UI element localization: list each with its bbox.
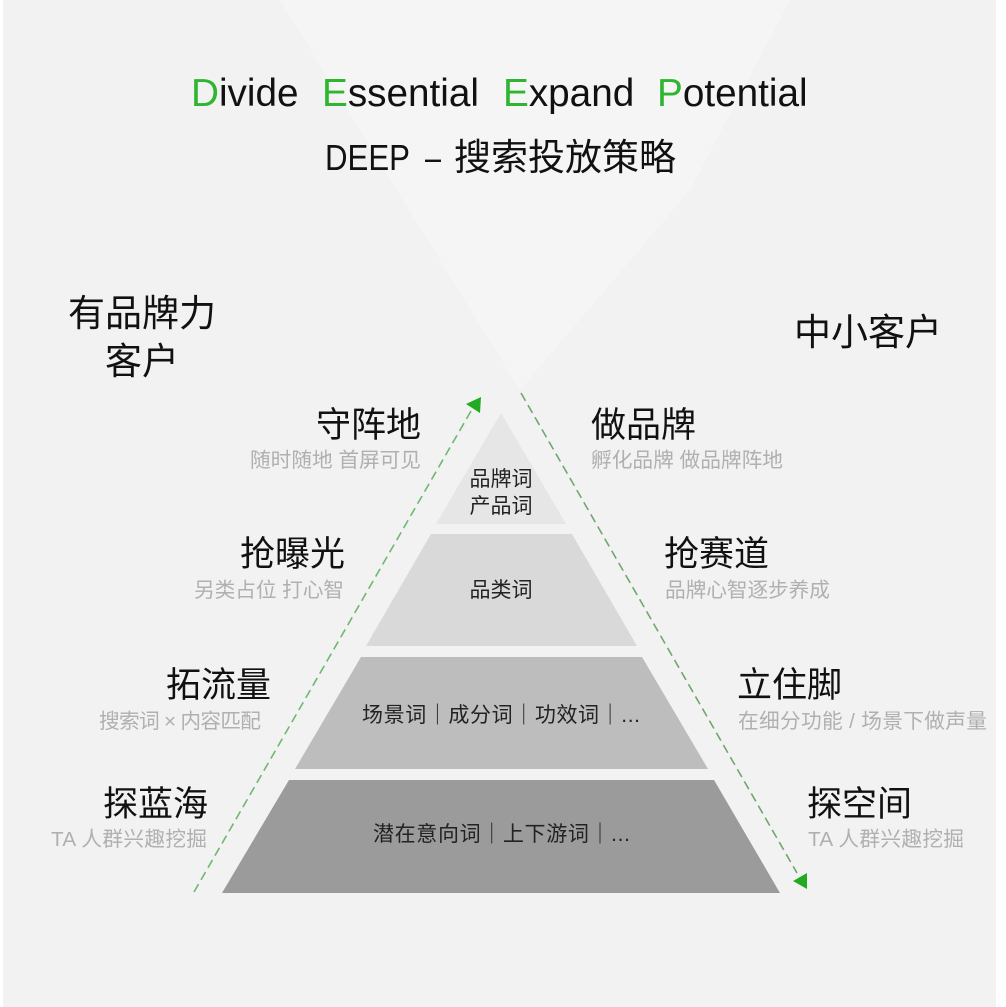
left label: 探蓝海: TA 人群兴趣挖掘	[51, 828, 207, 851]
pyramid tier 2	[366, 534, 637, 646]
right label: 探空间: 探空间	[807, 785, 912, 824]
left label: 拓流量	[99, 666, 271, 733]
subtitle: DEEP	[325, 137, 410, 178]
left label: 抢曝光: 抢曝光	[240, 535, 345, 574]
arrow: upward left	[194, 397, 481, 892]
right label: 立住脚: 立住脚	[737, 666, 842, 705]
pyramid tier 4: 潜在意向词｜上下游词｜...	[373, 823, 630, 846]
title: Divide	[191, 72, 299, 115]
right label: 探空间: TA 人群兴趣挖掘	[808, 828, 964, 851]
title	[191, 72, 808, 115]
right label: 探空间	[807, 785, 964, 851]
right label: 抢赛道: 品牌心智逐步养成	[665, 579, 830, 602]
left label: 探蓝海: 探蓝海	[103, 785, 208, 824]
subtitle: –	[425, 137, 441, 178]
right label: 立住脚	[737, 666, 987, 733]
title: Expand	[503, 72, 634, 115]
left label: 拓流量: 拓流量	[166, 666, 271, 705]
pyramid	[222, 413, 780, 893]
title: Essential	[322, 72, 479, 115]
left label: 守阵地: 守阵地	[316, 406, 421, 445]
pyramid tier 3: 场景词｜成分词｜功效词｜...	[362, 704, 640, 727]
left label: 守阵地	[250, 406, 421, 472]
left label: 探蓝海	[51, 785, 208, 851]
left audience label	[68, 293, 216, 382]
right label: 抢赛道: 抢赛道	[664, 535, 769, 574]
pyramid tier 1: 品牌词	[470, 468, 532, 491]
subtitle	[325, 137, 676, 178]
right label: 做品牌: 做品牌	[591, 406, 696, 445]
title: Potential	[657, 72, 808, 115]
left label: 抢曝光: 另类占位 打心智	[194, 579, 344, 602]
arrow: downward right	[521, 393, 807, 889]
right label: 抢赛道	[664, 535, 830, 602]
pyramid tier 3	[295, 657, 708, 769]
subtitle: 搜索投放策略	[454, 137, 676, 178]
pyramid tier 1: 产品词	[470, 495, 532, 518]
pyramid tier 1	[436, 413, 566, 524]
right label: 做品牌	[591, 406, 783, 472]
right label: 立住脚: 在细分功能 / 场景下做声量	[738, 710, 987, 733]
pyramid tier 2: 品类词	[470, 579, 532, 602]
left label: 抢曝光	[194, 535, 345, 602]
left label: 拓流量: 搜索词 × 内容匹配	[99, 710, 261, 733]
pyramid tier 4	[222, 780, 780, 893]
right audience label: 中小客户	[794, 312, 942, 353]
left audience label: 有品牌力	[68, 293, 216, 334]
right label: 做品牌: 孵化品牌 做品牌阵地	[591, 449, 783, 472]
left label: 守阵地: 随时随地 首屏可见	[250, 449, 421, 472]
left audience label: 客户	[105, 341, 179, 382]
